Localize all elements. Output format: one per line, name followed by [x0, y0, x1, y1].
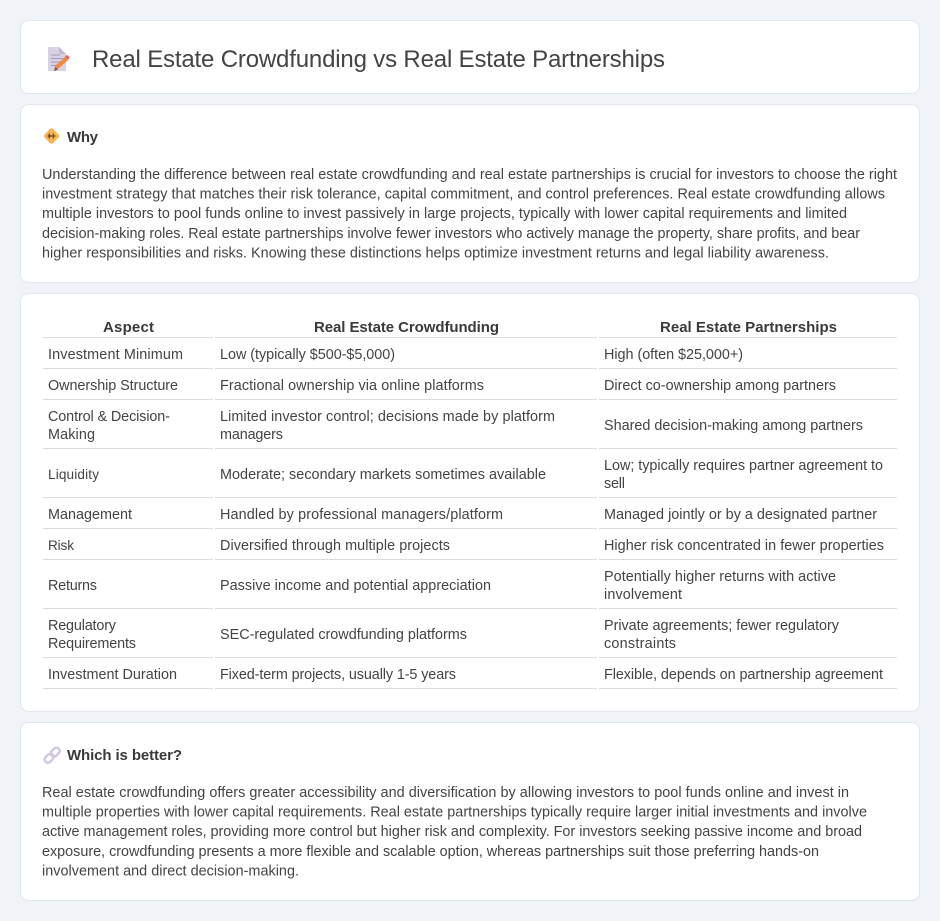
row: investment minimum: Investment Minimum	[48, 347, 183, 363]
row: regulatory requirements: constraints	[604, 636, 676, 652]
row: control and decision-making	[48, 409, 863, 443]
row: regulatory requirements: Private agreements; fewer regulatory	[604, 618, 840, 634]
table header: Real Estate Crowdfunding	[314, 319, 499, 336]
panel: comparison table	[20, 294, 920, 712]
row: regulatory requirements	[48, 618, 840, 652]
title: Real Estate Crowdfunding vs Real Estate Partnerships	[92, 46, 665, 73]
icon: warning diamond	[43, 128, 60, 144]
row: risk: Higher risk concentrated in fewer properties	[604, 538, 884, 554]
table header: Aspect	[103, 319, 154, 336]
row: regulatory requirements: SEC-regulated crowdfunding platforms	[220, 627, 467, 643]
row: investment minimum	[48, 347, 743, 363]
row: management: Managed jointly or by a designated partner	[604, 507, 877, 523]
row: control and decision-making: Shared decision-making among partners	[604, 418, 863, 434]
text block: which is better	[42, 785, 867, 879]
text block: why: decision-making roles. Real estate partnerships involve fewer investors who actively manage the property, share profits, and bear	[42, 226, 860, 242]
row: investment duration: Flexible, depends on partnership agreement	[604, 667, 883, 683]
row: investment duration: Investment Duration	[48, 667, 177, 683]
row: liquidity: sell	[604, 476, 625, 492]
row: risk: Risk	[48, 538, 74, 553]
row: investment duration: Fixed-term projects, usually 1-5 years	[220, 667, 456, 683]
row: ownership structure: Ownership Structure	[48, 378, 178, 394]
row: management: Handled by professional managers/platform	[220, 507, 503, 523]
text block: why: multiple investors to pool funds online to invest passively in large projects, typically with lower capital requirements and limited	[42, 206, 847, 222]
heading: why: Why	[67, 129, 99, 146]
text block: why: investment strategy that matches their risk tolerance, capital commitment, and control preferences. Real estate crowdfunding allows	[42, 187, 885, 203]
text block: why: Understanding the difference between real estate crowdfunding and real estate partnerships is crucial for investors to choose the right	[42, 167, 897, 183]
text block: which is better: multiple properties with lower capital requirements. Real estate partnerships typically require larger initial investments and involve	[42, 805, 867, 821]
row: control and decision-making: managers	[220, 427, 283, 443]
row: control and decision-making: Control & Decision-	[48, 409, 170, 425]
table header: Real Estate Partnerships	[660, 319, 837, 336]
row: returns: Potentially higher returns with active	[604, 569, 836, 585]
row: liquidity: Liquidity	[48, 467, 99, 482]
heading: which is better: Which is better?	[67, 747, 182, 764]
row: investment duration	[48, 667, 883, 683]
row: management	[48, 507, 877, 523]
row: liquidity: Moderate; secondary markets sometimes available	[220, 467, 546, 483]
row: ownership structure: Direct co-ownership among partners	[604, 378, 836, 394]
table header	[103, 319, 837, 336]
icon: document with pencil	[48, 47, 70, 71]
row: liquidity: Low; typically requires partner agreement to	[604, 458, 883, 474]
row: control and decision-making: Making	[48, 427, 95, 443]
row: investment minimum: High (often $25,000+)	[604, 347, 743, 363]
text block: which is better: Real estate crowdfunding offers greater accessibility and diversification by allowing investors to pool funds online and invest in	[42, 785, 849, 801]
row: regulatory requirements: Regulatory	[48, 618, 117, 634]
text block: why	[42, 167, 897, 261]
text block: why: higher responsibilities and risks. Knowing these distinctions helps optimize investment returns and legal liability awareness.	[42, 245, 829, 261]
row: liquidity	[48, 458, 883, 492]
panel: title card	[20, 20, 920, 94]
row: ownership structure	[48, 378, 836, 394]
row: returns: Returns	[48, 578, 97, 594]
row: risk	[48, 538, 884, 554]
text block: which is better: involvement and direct decision-making.	[42, 863, 299, 879]
row: risk: Diversified through multiple projects	[220, 538, 450, 554]
text block: which is better: exposure, crowdfunding presents a more flexible and scalable option, whereas partnerships suit those preferring hands-on	[42, 844, 819, 860]
row: returns: Passive income and potential appreciation	[220, 578, 491, 594]
row: ownership structure: Fractional ownership via online platforms	[220, 378, 484, 394]
panel: which is better	[20, 722, 920, 900]
row: control and decision-making: Limited investor control; decisions made by platform	[220, 409, 555, 425]
row: investment minimum: Low (typically $500-$5,000)	[220, 347, 395, 363]
row: management: Management	[48, 507, 132, 523]
row: returns: involvement	[604, 587, 682, 603]
row: regulatory requirements: Requirements	[48, 636, 136, 652]
icon: chain link	[43, 746, 61, 764]
text block: which is better: active management roles, providing more control but higher risk and complexity. For investors seeking passive income and broad	[42, 824, 862, 840]
row: returns	[48, 569, 836, 603]
panel: why	[20, 104, 920, 282]
